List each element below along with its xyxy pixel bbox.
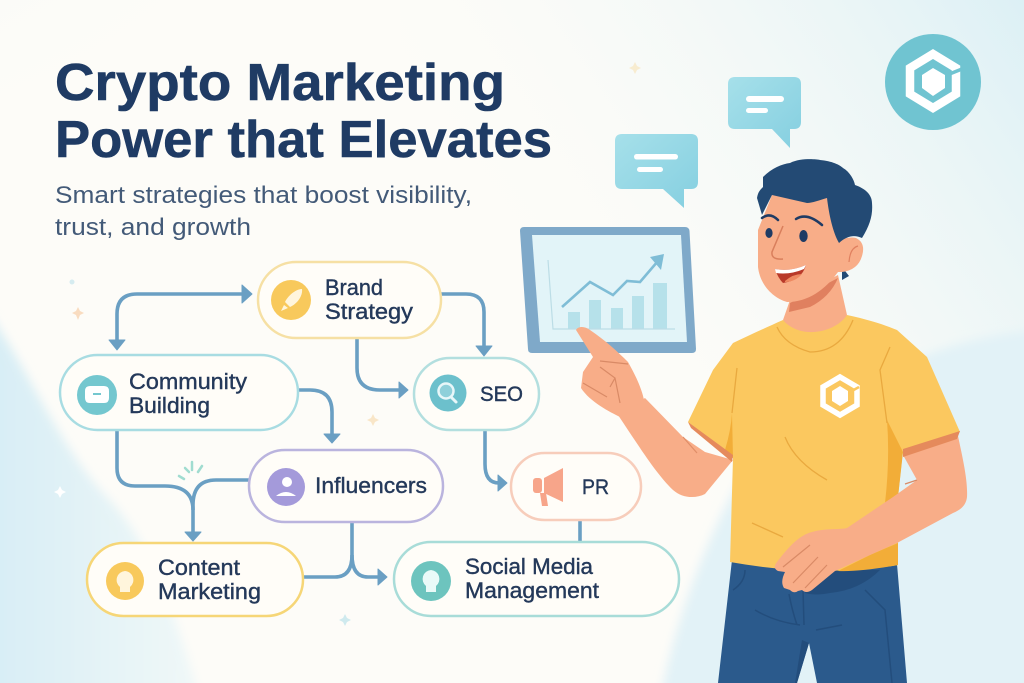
arrow: community and influencers to content bbox=[117, 430, 249, 541]
right arm and hand bbox=[775, 436, 967, 592]
collar bbox=[777, 320, 853, 352]
sleeve seams and creases bbox=[732, 347, 890, 537]
icon: megaphone bbox=[533, 468, 563, 506]
arrow: SEO to PR bbox=[485, 430, 507, 491]
nose bbox=[772, 226, 783, 259]
title: Power that Elevates bbox=[55, 111, 552, 169]
sparkles bbox=[54, 62, 641, 626]
icon: magnifier bbox=[430, 374, 466, 412]
node: influencers: Influencers bbox=[315, 473, 427, 498]
node: brand strategy: Strategy bbox=[325, 299, 414, 324]
icon: people bbox=[267, 468, 305, 506]
arrow: influencers to social bbox=[303, 522, 387, 585]
left arm bbox=[618, 398, 733, 497]
node: influencers bbox=[249, 450, 443, 522]
shirt bbox=[688, 315, 960, 571]
shirt shading bbox=[838, 420, 903, 571]
node: community building bbox=[60, 355, 298, 430]
node: social media management bbox=[394, 542, 679, 616]
speech bubble right bbox=[728, 77, 801, 148]
arrow: strategy to SEO side bbox=[357, 338, 408, 398]
neck bbox=[783, 275, 847, 332]
node: social media management: Management bbox=[465, 578, 600, 603]
left sleeve hem bbox=[688, 422, 733, 462]
ear bbox=[830, 238, 863, 272]
arrow: strategy to community and back bbox=[109, 285, 252, 350]
hair back bbox=[842, 267, 849, 280]
pointing hand bbox=[576, 327, 644, 417]
tablet chart bbox=[520, 227, 696, 353]
mouth bbox=[775, 265, 806, 283]
pants bbox=[718, 560, 907, 683]
node: PR bbox=[511, 453, 641, 520]
title bbox=[55, 54, 552, 169]
right sleeve hem bbox=[903, 431, 960, 457]
shirt logo bbox=[823, 377, 859, 415]
arrow: strategy to SEO top bbox=[441, 294, 492, 356]
icon: bulb bbox=[106, 562, 144, 600]
node: SEO: SEO bbox=[480, 383, 523, 406]
trend line bbox=[562, 261, 658, 307]
node: community building: Community bbox=[129, 369, 248, 394]
hair bbox=[757, 159, 872, 243]
bars bbox=[568, 283, 667, 329]
logo badge bbox=[885, 34, 981, 130]
icon: rocket bbox=[271, 280, 311, 320]
arrow: community to influencers bbox=[298, 390, 340, 443]
speech bubble left bbox=[615, 134, 698, 208]
node: brand strategy: Brand bbox=[325, 275, 383, 300]
node: SEO bbox=[414, 358, 539, 430]
node: content marketing: Content bbox=[158, 555, 241, 580]
node: social media management: Social Media bbox=[465, 554, 593, 579]
icon: bulb teal bbox=[411, 561, 451, 601]
node: content marketing bbox=[87, 543, 303, 616]
subtitle bbox=[55, 182, 472, 241]
character bbox=[576, 159, 967, 683]
connector: PR to social bbox=[578, 520, 582, 542]
connectors bbox=[109, 285, 580, 585]
node: community building: Building bbox=[129, 393, 210, 418]
icon: chat bbox=[77, 375, 117, 415]
subtitle: Smart strategies that boost visibility, bbox=[55, 182, 472, 209]
eyes and brows bbox=[762, 215, 822, 242]
face bbox=[758, 195, 840, 302]
node: PR: PR bbox=[582, 476, 609, 499]
title: Crypto Marketing bbox=[55, 54, 505, 112]
node: content marketing: Marketing bbox=[158, 579, 261, 604]
subtitle: trust, and growth bbox=[55, 214, 251, 241]
node: brand strategy bbox=[258, 262, 441, 338]
